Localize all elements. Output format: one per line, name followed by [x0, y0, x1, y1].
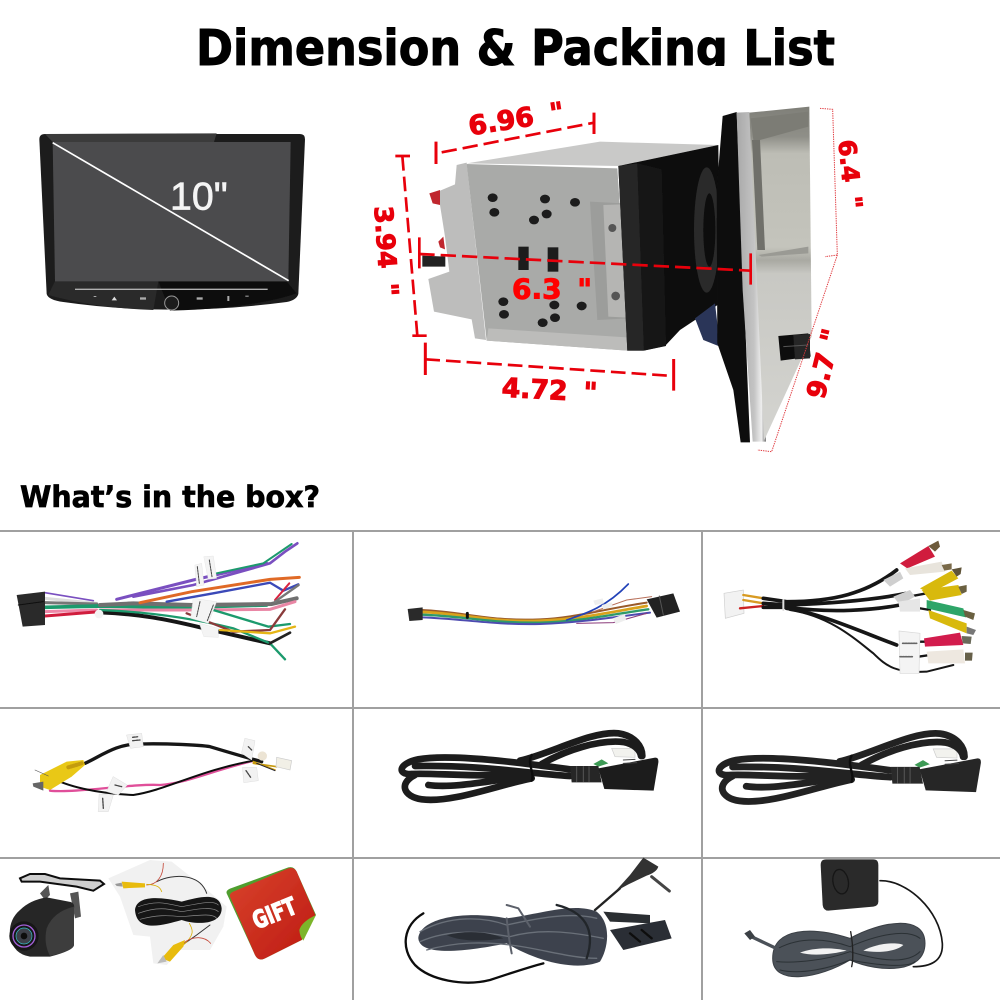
- label: 6.96 in: 6.96 ": [466, 97, 566, 142]
- grid lines: [0, 531, 1000, 1000]
- item: GPS antenna: [744, 859, 942, 977]
- title: Dimension & Packing List: [196, 20, 835, 77]
- thin dotted guides: [757, 108, 837, 452]
- label: 6.4 in: 6.4 ": [832, 138, 867, 210]
- label: 6.3 in: 6.3 ": [512, 273, 592, 306]
- illustration: 10 inch screen front view: 10": [170, 174, 228, 218]
- dashed measure: 6.96: [436, 113, 594, 164]
- label: 3.94 in: 3.94 ": [368, 205, 405, 297]
- label: 9.7 in: 9.7 ": [802, 326, 848, 402]
- illustration: head unit side view with dimensions: [368, 97, 867, 452]
- item: small connector harness: [408, 584, 680, 624]
- icon: gift sticker: GIFT: [248, 892, 301, 935]
- dashed measure: 3.94: [395, 156, 427, 336]
- item: RCA audio and video cable: [724, 541, 976, 673]
- item: rear camera power cable: [33, 733, 292, 812]
- item: microphone cable: [406, 858, 672, 983]
- item: main power wiring harness: [17, 543, 299, 659]
- item: camera extension cable: [108, 860, 227, 965]
- dashed measure: 4.72: [425, 343, 674, 391]
- icon: gift sticker: [226, 867, 316, 959]
- item: USB cable, middle column: [402, 733, 658, 800]
- chassis: [422, 142, 720, 351]
- item: USB cable, right column: [719, 733, 981, 801]
- illustration: 10 inch screen front view: [39, 133, 305, 311]
- subheading: What’s in the box?: [20, 480, 320, 514]
- item: reversing camera: [9, 874, 104, 957]
- display panel: [717, 107, 812, 442]
- dashed measure: 6.3: [419, 237, 751, 285]
- label: 4.72 in: 4.72 ": [501, 373, 598, 409]
